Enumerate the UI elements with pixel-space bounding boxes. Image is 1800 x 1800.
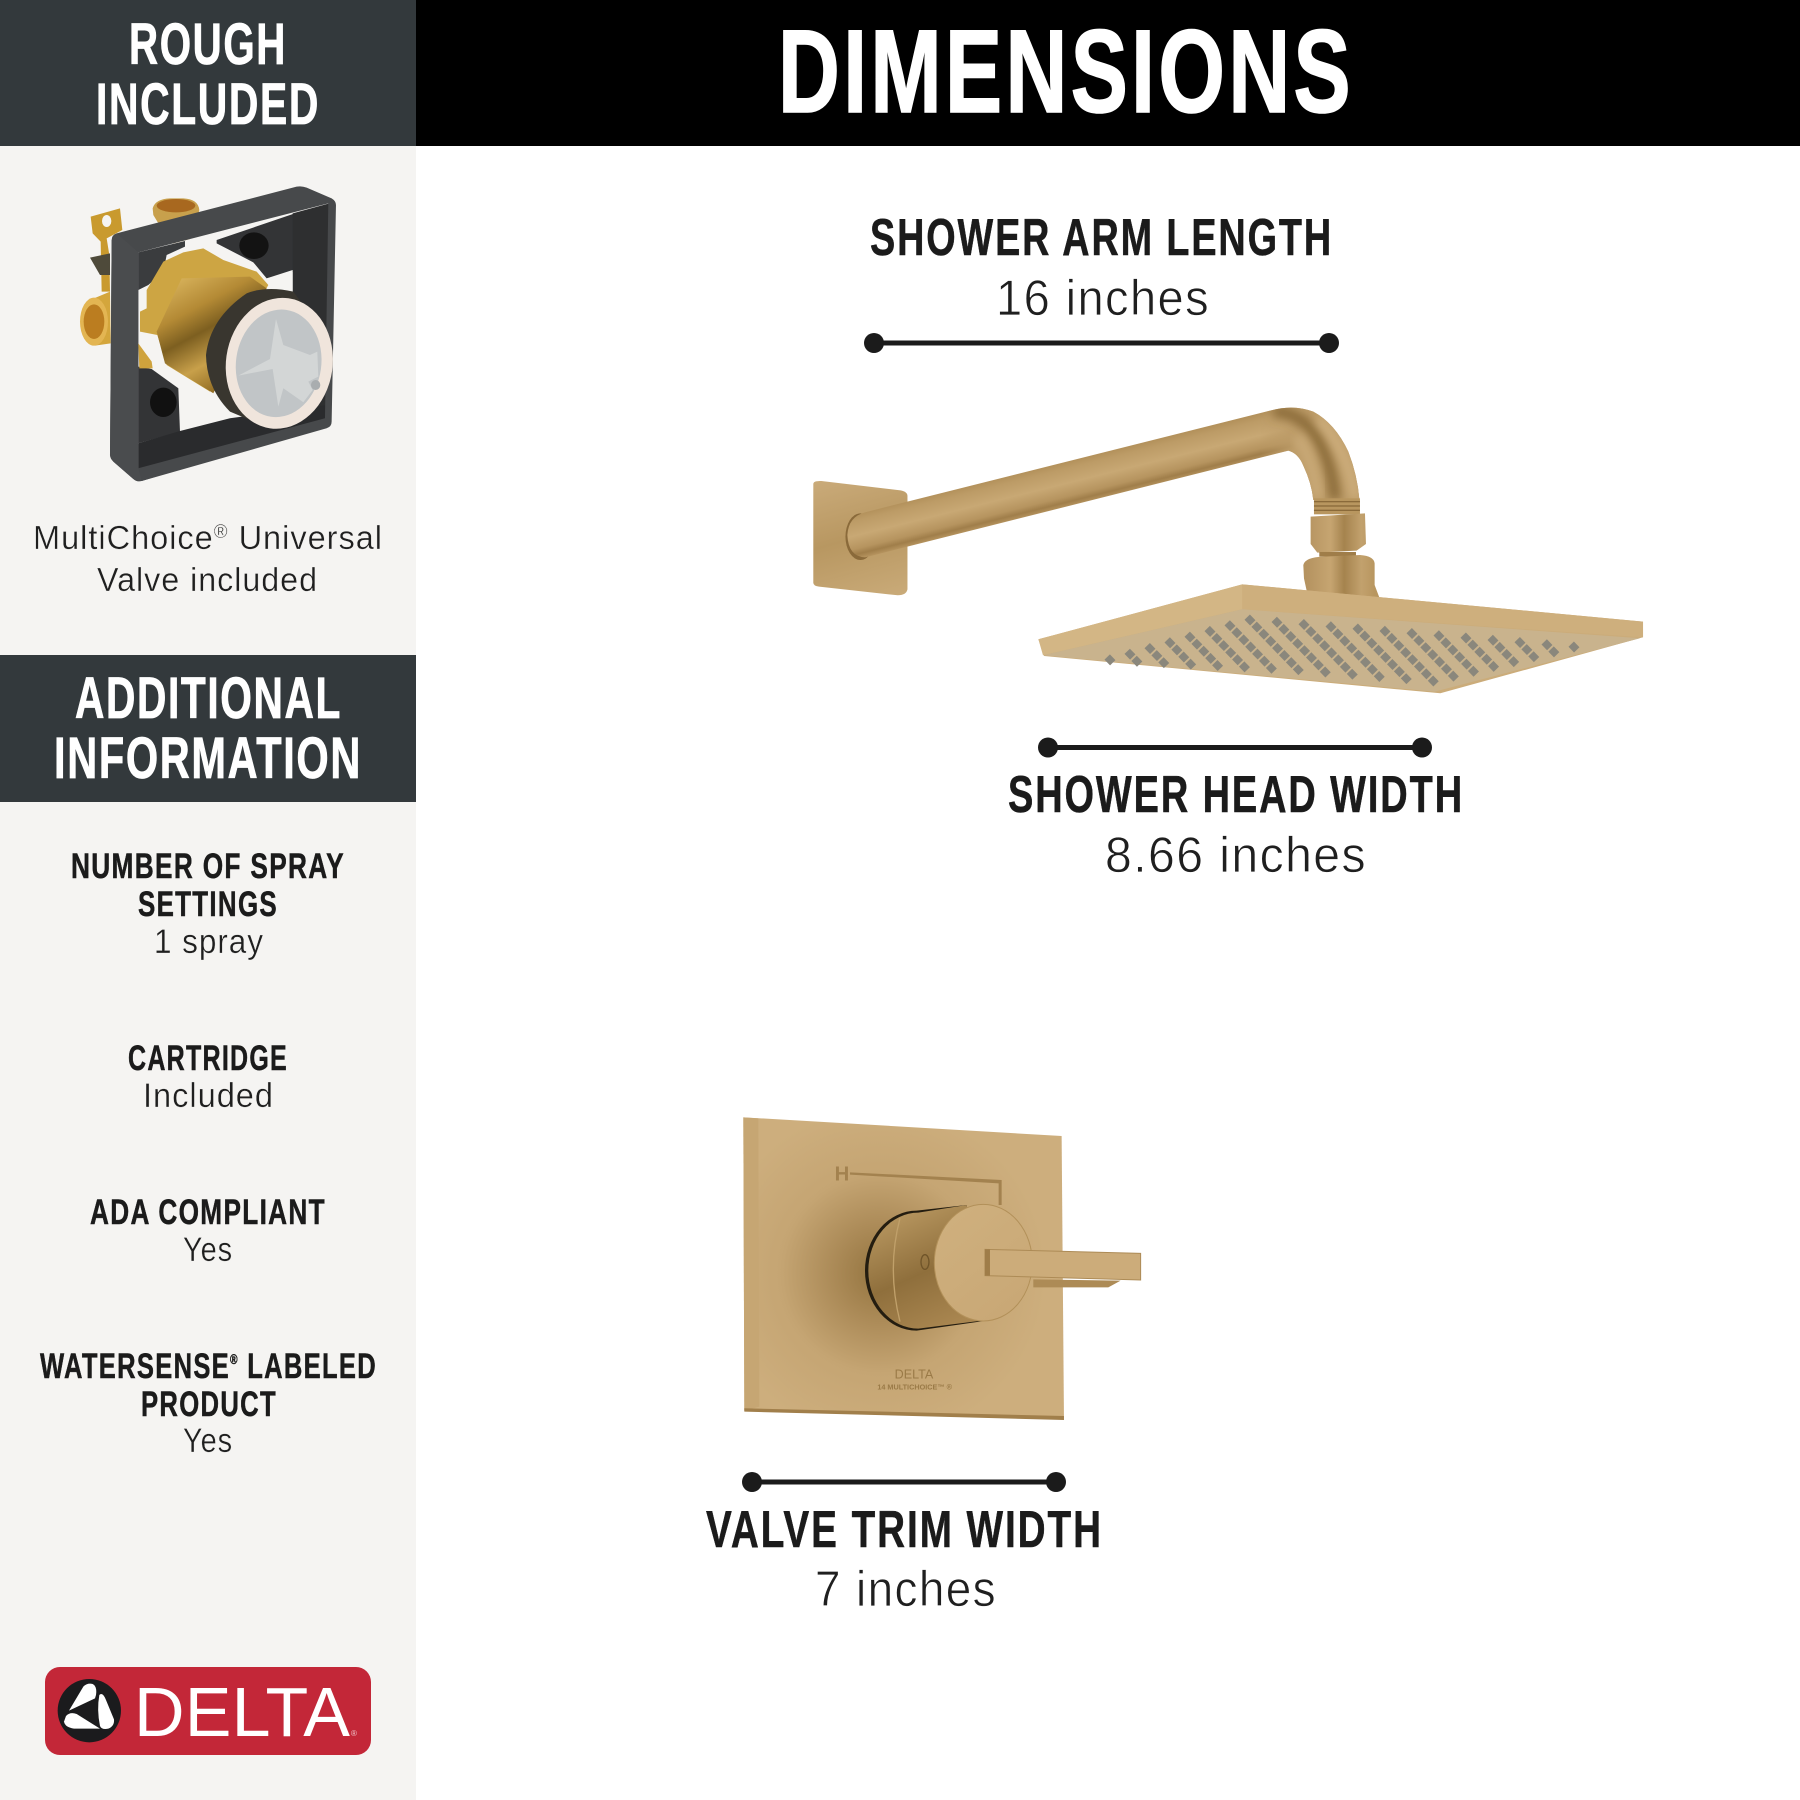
lever (985, 1249, 1141, 1280)
image: shower flange (813, 481, 907, 595)
heading: additional information: INFORMATION (54, 726, 362, 791)
chrome ring (206, 289, 330, 428)
label: valve trim width: 7 inches (815, 1561, 997, 1617)
top port (153, 198, 201, 258)
heading: additional information: ADDITIONAL (75, 666, 342, 731)
title bar (416, 0, 1800, 146)
panel: left sidebar (0, 0, 416, 1800)
logo: Delta: DELTA (134, 1673, 350, 1751)
logo: Delta (45, 1667, 371, 1755)
heading: additional information (0, 655, 416, 802)
spec: cartridge: Included (143, 1077, 274, 1115)
knob body (868, 1205, 987, 1329)
spec: spray settings (71, 847, 345, 961)
label: shower arm length (870, 209, 1333, 326)
ball joint (1303, 555, 1379, 597)
mounting tab (91, 208, 122, 292)
spec: watersense: Yes (183, 1422, 233, 1460)
label: shower arm length: 16 inches (996, 270, 1210, 326)
knob dark edge (865, 1205, 987, 1331)
spec: ADA compliant: Yes (183, 1231, 233, 1269)
text: valve note: Valve included (97, 561, 318, 598)
elbow shading (1267, 408, 1360, 500)
engraved logo: 14 MULTICHOICE™ ® (877, 1383, 953, 1392)
window interior (138, 203, 328, 468)
spec: ADA compliant (90, 1193, 326, 1269)
image: shower head (1038, 584, 1643, 693)
spec: watersense: PRODUCT (141, 1385, 277, 1424)
heading: rough included (0, 0, 416, 146)
head underside (1043, 609, 1640, 692)
text: valve note (33, 519, 383, 598)
label: valve trim width (706, 1501, 1103, 1617)
frame (110, 186, 336, 481)
plate (743, 1117, 1064, 1418)
text: valve note: ® (214, 522, 229, 543)
label: shower head width: SHOWER HEAD WIDTH (1008, 766, 1464, 824)
valve cap cross (238, 319, 318, 407)
head rim (1038, 584, 1643, 693)
spec: ADA compliant: ADA COMPLIANT (90, 1193, 326, 1232)
spec: watersense: WATERSENSE (40, 1347, 300, 1386)
swivel nut (1311, 513, 1366, 553)
text: valve note: MultiChoice (33, 519, 216, 556)
title bar: DIMENSIONS (778, 6, 1354, 138)
lever underside (1033, 1279, 1121, 1287)
hot marking (835, 1163, 1002, 1205)
image: valve trim (743, 1117, 1141, 1420)
dimension line: shower arm (864, 333, 1339, 353)
spec: watersense: ® (230, 1351, 239, 1367)
heading: rough included: INCLUDED (96, 72, 320, 137)
left port (94, 292, 111, 346)
hot marking: H (835, 1163, 849, 1186)
spec: watersense: LABELED (239, 1347, 377, 1386)
image: shower arm (847, 400, 1379, 597)
threads (1314, 498, 1360, 514)
spray nozzles (1107, 617, 1577, 684)
label: shower head width (1008, 766, 1464, 883)
label: valve trim width: VALVE TRIM WIDTH (706, 1501, 1103, 1559)
knob face (934, 1204, 1032, 1321)
heading: rough included: ROUGH (129, 12, 287, 77)
engraved logo: DELTA (895, 1367, 933, 1382)
icon: rough valve (80, 186, 341, 481)
spec: cartridge: CARTRIDGE (128, 1039, 288, 1078)
text: valve note: Universal (229, 519, 383, 556)
label: shower arm length: SHOWER ARM LENGTH (870, 209, 1333, 267)
spec: cartridge (128, 1039, 288, 1115)
label: shower head width: 8.66 inches (1105, 827, 1367, 883)
dimension line: valve trim (742, 1472, 1066, 1492)
dimension line: shower head (1038, 738, 1432, 758)
spec: spray settings: NUMBER OF SPRAY (71, 847, 345, 886)
spec: spray settings: SETTINGS (138, 885, 278, 924)
spec: spray settings: 1 spray (154, 923, 264, 961)
spec: watersense (40, 1347, 377, 1460)
brass body (140, 248, 268, 392)
engraved logo (877, 1367, 953, 1392)
logo: Delta: ® (351, 1729, 357, 1738)
